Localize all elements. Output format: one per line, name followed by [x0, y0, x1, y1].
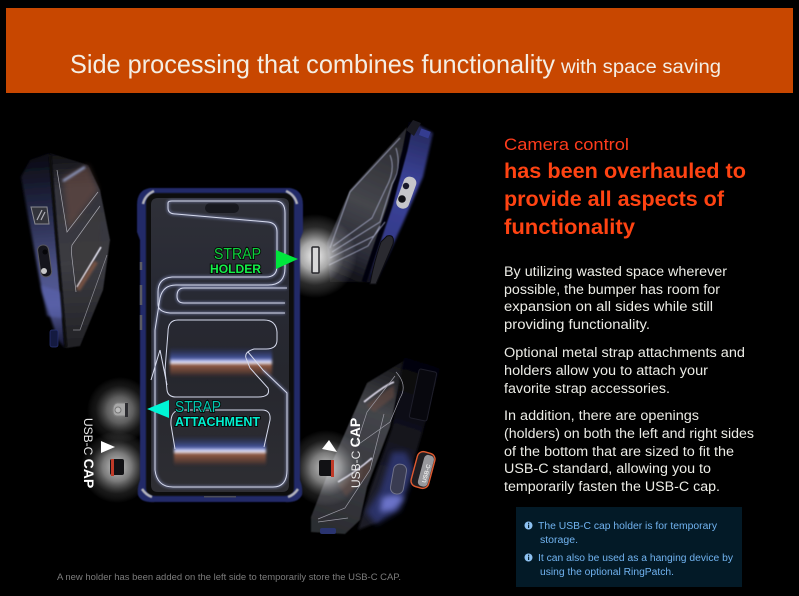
- arrow: strap holder: [276, 250, 298, 269]
- body text: paragraph 1: [504, 264, 728, 332]
- corner highlights: [142, 191, 298, 497]
- side button: [370, 236, 393, 284]
- body text: paragraph 3: In addition, there are openings: [504, 408, 699, 423]
- note box: [516, 507, 742, 587]
- side opening: [395, 175, 418, 210]
- micro label: [204, 496, 236, 498]
- callout: usb-c cap left glow: [81, 431, 153, 503]
- icon: info 1: [524, 522, 532, 530]
- part: usb-c cap right: [319, 460, 334, 477]
- arrow: strap attachment: [147, 400, 169, 418]
- phone: front view: [137, 188, 303, 502]
- body text: paragraph 3: temporarily fasten the USB-C cap.: [504, 479, 720, 494]
- title suffix: with space saving: [560, 57, 721, 78]
- label: strap attachment: ATTACHMENT: [175, 414, 260, 429]
- caption: A new holder has been added on the left side to temporarily store the USB-C CAP.: [57, 572, 401, 582]
- callout: usb-c cap right glow: [288, 430, 364, 506]
- body text: paragraph 3: [504, 408, 754, 494]
- lower glow band: [174, 436, 266, 466]
- label: strap holder: [210, 246, 261, 276]
- body text: paragraph 3: (holders) on both the left and right sides: [504, 426, 754, 441]
- note text: It can also be used as a hanging device by: [538, 553, 733, 564]
- body text: paragraph 1: expansion on all sides while still: [504, 299, 713, 314]
- callout: strap attachment glow: [87, 377, 153, 443]
- body text: paragraph 2: holders allow you to attach your: [504, 363, 709, 378]
- body text: paragraph 3: of the bottom that are sized to fit the: [504, 444, 734, 459]
- body text: paragraph 1: providing functionality.: [504, 317, 650, 332]
- body text: paragraph 2: Optional metal strap attachments and: [504, 345, 745, 360]
- side holder opening: [37, 244, 52, 278]
- note text: [538, 521, 733, 578]
- phone: left side view: [21, 153, 110, 348]
- part: strap holder: [312, 247, 319, 273]
- heading: provide all aspects of: [504, 188, 725, 211]
- header banner: [6, 8, 793, 93]
- note text: using the optional RingPatch.: [540, 567, 674, 578]
- title: Side processing that combines functionality: [70, 49, 555, 79]
- usb-c cap attached: USB-C: [422, 463, 433, 484]
- note text: storage.: [540, 535, 578, 546]
- heading: has been overhauled to: [504, 160, 746, 183]
- part: usb-c cap left: [110, 459, 124, 476]
- body text: paragraph 3: USB-C standard, allowing you to: [504, 461, 711, 476]
- phone: lower right angled view: [311, 350, 445, 534]
- arrow: usb-c cap left: [101, 441, 115, 453]
- body text: paragraph 1: By utilizing wasted space wherever: [504, 264, 728, 279]
- heading: [504, 160, 746, 239]
- side buttons: [140, 262, 142, 330]
- label: strap attachment: STRAP: [175, 399, 221, 416]
- phone: upper right angled view: [327, 120, 433, 284]
- camera notch: [205, 203, 239, 213]
- serpentine contour lines: [151, 201, 287, 487]
- label: strap holder: STRAP: [214, 246, 261, 263]
- callout: strap holder glow: [273, 214, 357, 298]
- usb-c cap attached: [410, 450, 436, 490]
- body text: paragraph 2: [504, 345, 745, 396]
- label: usb-c cap left: USB-C CAP: [81, 418, 97, 488]
- label: strap attachment: [175, 399, 260, 429]
- note text: The USB-C cap holder is for temporary: [538, 521, 717, 532]
- heading: functionality: [504, 216, 635, 239]
- icon: logo badge: [31, 207, 49, 224]
- label: strap holder: HOLDER: [210, 262, 261, 276]
- part: strap attachment: [113, 403, 128, 417]
- upper glow band: [170, 347, 272, 377]
- serpentine contour glow: [155, 201, 287, 487]
- side opening: [389, 463, 407, 495]
- body text: paragraph 1: possible, the bumper has room for: [504, 282, 721, 297]
- subheading: Camera control: [504, 135, 629, 154]
- icon: info 2: [524, 554, 532, 562]
- body text: paragraph 2: favorite strap accessories.: [504, 381, 670, 396]
- arrow: usb-c cap right: [322, 440, 337, 452]
- label: usb-c cap right: USB-C CAP: [347, 418, 363, 488]
